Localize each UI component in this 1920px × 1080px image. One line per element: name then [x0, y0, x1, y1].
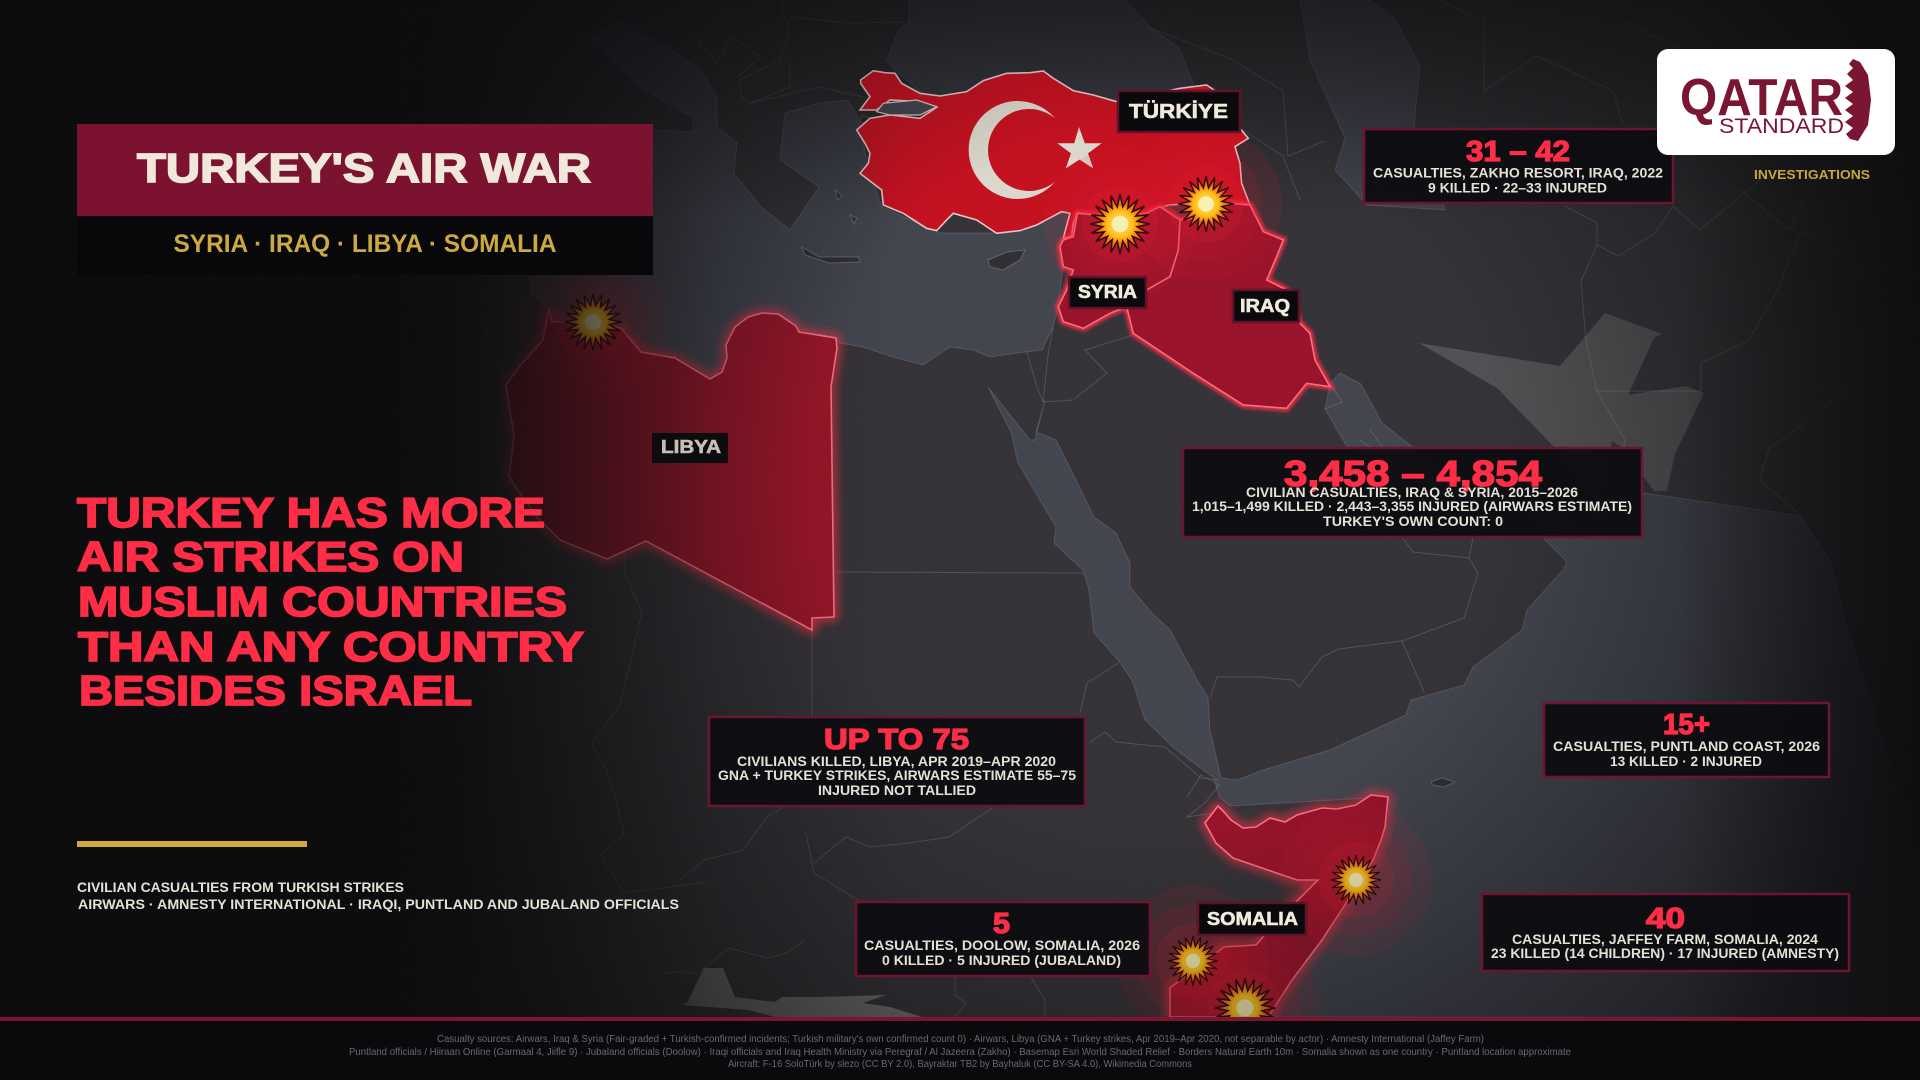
- country: Türkiye with flag: [857, 71, 1250, 238]
- icon: Qatar map: [1845, 59, 1871, 141]
- country: Libya: [506, 309, 837, 630]
- label: Türkiye: [1118, 91, 1240, 132]
- footer sources: Casualty sources: Airwars, Iraq & Syria (Fair-graded + Turkish-confirmed incidents; Turkish military's own confirmed count 0) · Airwars, Libya (GNA + Turkey strikes, Apr 2019–Apr 2020, not separable by actor) · Amnesty International (Jaffey Farm): [437, 1033, 1484, 1045]
- top fade overlay: [590, 0, 1782, 184]
- left fade overlay: [0, 0, 900, 1017]
- vignette overlay: [484, 0, 1920, 1017]
- logo: Qatar Standard: [1657, 49, 1895, 155]
- callout: Zakho: [1364, 129, 1673, 203]
- subtitle background: [77, 216, 653, 275]
- callout: Jaffey Farm: 40: [1646, 903, 1685, 935]
- footer sources: Aircraft: F-16 SoloTürk by slezo (CC BY 2.0), Bayraktar TB2 by Bayhaluk (CC BY-SA 4.0), Wikimedia Commons: [728, 1058, 1192, 1070]
- callout: Zakho: 31 – 42: [1466, 136, 1570, 168]
- title: TURKEY'S AIR WAR: [137, 145, 591, 191]
- callout: Zakho: 9 KILLED · 22–33 INJURED: [1428, 180, 1607, 196]
- title panel: [77, 124, 653, 275]
- callout: Puntland: 13 KILLED · 2 INJURED: [1610, 754, 1762, 769]
- map background: [484, 0, 1883, 1017]
- right fade overlay: [1719, 152, 1920, 1017]
- footer sources: Puntland officials / Hiiraan Online (Garmaal 4, Jiifle 9) · Jubaland officials (Doolow) · Iraqi officials and Iraq Health Ministry via Peregraf / Al Jazeera (Zakho) · Basemap Esri World Shaded Relief · Borders Natural Earth 10m · Somalia shown as one country · Puntland location approximate: [349, 1046, 1571, 1058]
- callout: Doolow: 5: [993, 908, 1010, 940]
- footer sources: [349, 1033, 1571, 1070]
- callout: Jaffey Farm: CASUALTIES, JAFFEY FARM, SOMALIA, 2024: [1512, 932, 1819, 947]
- byline text: CIVILIAN CASUALTIES FROM TURKISH STRIKES: [77, 880, 404, 895]
- headline: BESIDES ISRAEL: [79, 667, 472, 714]
- callout: Puntland: [1544, 703, 1829, 777]
- logo: Qatar Standard: STANDARD: [1719, 115, 1844, 138]
- callout: Libya: UP TO 75: [824, 724, 969, 756]
- byline text: AIRWARS · AMNESTY INTERNATIONAL · IRAQI, PUNTLAND AND JUBALAND OFFICIALS: [78, 897, 679, 912]
- aircraft: F-16 silhouette: [1420, 313, 1704, 491]
- callout: Puntland: 15+: [1663, 709, 1710, 741]
- label: Libya: [652, 433, 728, 463]
- callout: Jaffey Farm: [1482, 894, 1849, 971]
- callout: Puntland: CASUALTIES, PUNTLAND COAST, 2026: [1553, 739, 1821, 754]
- gold rule: [77, 841, 307, 847]
- flag star: [1057, 127, 1102, 168]
- sea: Mediterranean: [530, 20, 1070, 379]
- investigations tag: INVESTIGATIONS: [1754, 167, 1870, 182]
- sea: Red Sea, Gulf of Aden, Arabian Sea and Persian Gulf: [988, 373, 1920, 1017]
- callout: Libya: [709, 717, 1085, 806]
- headline: MUSLIM COUNTRIES: [78, 578, 567, 625]
- callout: Iraq and Syria: [1183, 448, 1642, 537]
- callout: Zakho: CASUALTIES, ZAKHO RESORT, IRAQ, 2022: [1373, 166, 1663, 180]
- strike burst: Puntland: [1331, 855, 1381, 905]
- callout: Iraq and Syria: TURKEY'S OWN COUNT: 0: [1323, 514, 1503, 529]
- strike burst: Zakho: [1178, 176, 1234, 232]
- callout: Libya: INJURED NOT TALLIED: [818, 783, 976, 798]
- strike burst: Libya: [564, 294, 622, 350]
- callout: Doolow: [856, 902, 1150, 976]
- callout: Iraq and Syria: 3,458 – 4,854: [1284, 453, 1542, 494]
- headline: TURKEY HAS MORE: [77, 489, 545, 536]
- label: Iraq: [1233, 290, 1299, 322]
- label: Türkiye: TÜRKİYE: [1129, 100, 1228, 123]
- callout: Iraq and Syria: CIVILIAN CASUALTIES, IRAQ & SYRIA, 2015–2026: [1246, 485, 1579, 500]
- headline: AIR STRIKES ON: [77, 533, 464, 580]
- callout: Doolow: CASUALTIES, DOOLOW, SOMALIA, 2026: [864, 938, 1141, 953]
- title banner: [77, 124, 653, 216]
- country borders: [592, 3, 1817, 1017]
- callout: Iraq and Syria: 1,015–1,499 KILLED · 2,443–3,355 INJURED (AIRWARS ESTIMATE): [1192, 499, 1632, 514]
- strike glow rings: [542, 140, 1432, 1017]
- subtitle: SYRIA · IRAQ · LIBYA · SOMALIA: [174, 230, 556, 258]
- country: Somalia: [1170, 795, 1388, 1017]
- label: Libya: LIBYA: [661, 437, 721, 457]
- sea: Black Sea: [887, 0, 1193, 110]
- islands: [802, 115, 1455, 787]
- label: Somalia: [1198, 903, 1306, 935]
- strike burst: Doolow: [1168, 936, 1218, 986]
- strike burst: Jaffey Farm: [1214, 978, 1276, 1017]
- callout: Libya: CIVILIANS KILLED, LIBYA, APR 2019–APR 2020: [737, 754, 1056, 769]
- logo: Qatar Standard: QATAR: [1680, 69, 1843, 127]
- sea: Caspian: [1300, 0, 1445, 210]
- byline text: [77, 880, 679, 912]
- strike burst: Syria: [1090, 194, 1150, 254]
- label: Somalia: SOMALIA: [1207, 909, 1298, 929]
- callout: Jaffey Farm: 23 KILLED (14 CHILDREN) · 17 INJURED (AMNESTY): [1491, 946, 1839, 961]
- label: Syria: SYRIA: [1078, 282, 1137, 302]
- label: Iraq: IRAQ: [1240, 296, 1290, 316]
- headline: [77, 489, 584, 714]
- callout: Doolow: 0 KILLED · 5 INJURED (JUBALAND): [882, 953, 1121, 968]
- headline: THAN ANY COUNTRY: [78, 623, 584, 670]
- flag crescent: [969, 101, 1055, 199]
- footer band: [0, 1017, 1920, 1080]
- aircraft: Bayraktar TB2 silhouette: [683, 968, 922, 1017]
- label: Syria: [1069, 277, 1146, 308]
- countries: Syria and Iraq: [1058, 203, 1330, 408]
- callout: Libya: GNA + TURKEY STRIKES, AIRWARS ESTIMATE 55–75: [718, 768, 1077, 783]
